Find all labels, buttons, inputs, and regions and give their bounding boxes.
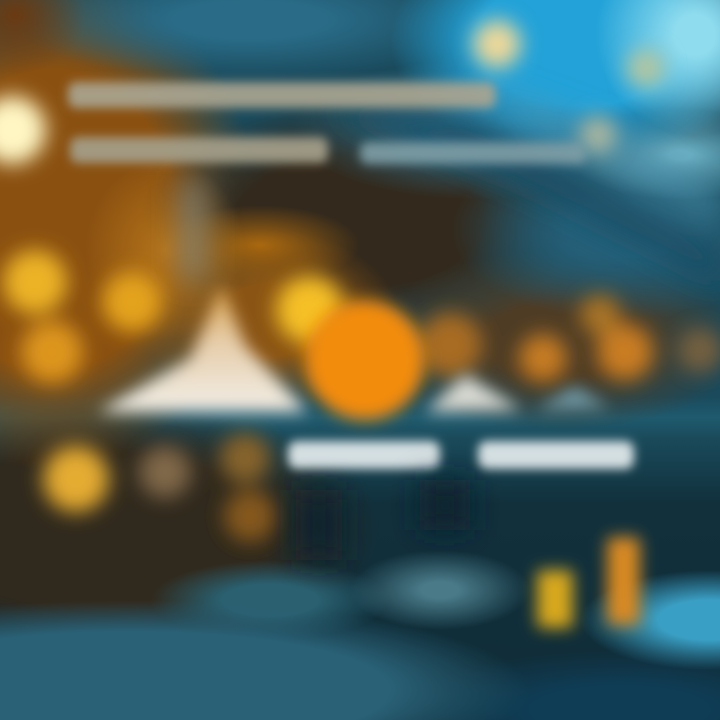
glowing orbs (0, 20, 720, 542)
diagonal light bands (180, 75, 720, 285)
yellow bar (537, 570, 573, 628)
dark columns (296, 480, 470, 560)
central orange circle (305, 300, 425, 420)
orange bar (607, 537, 640, 625)
title block, unreadable blurred lines (68, 82, 586, 164)
small bar chart (537, 537, 640, 628)
pale label bars (288, 441, 634, 469)
white mountain shapes (98, 285, 610, 412)
